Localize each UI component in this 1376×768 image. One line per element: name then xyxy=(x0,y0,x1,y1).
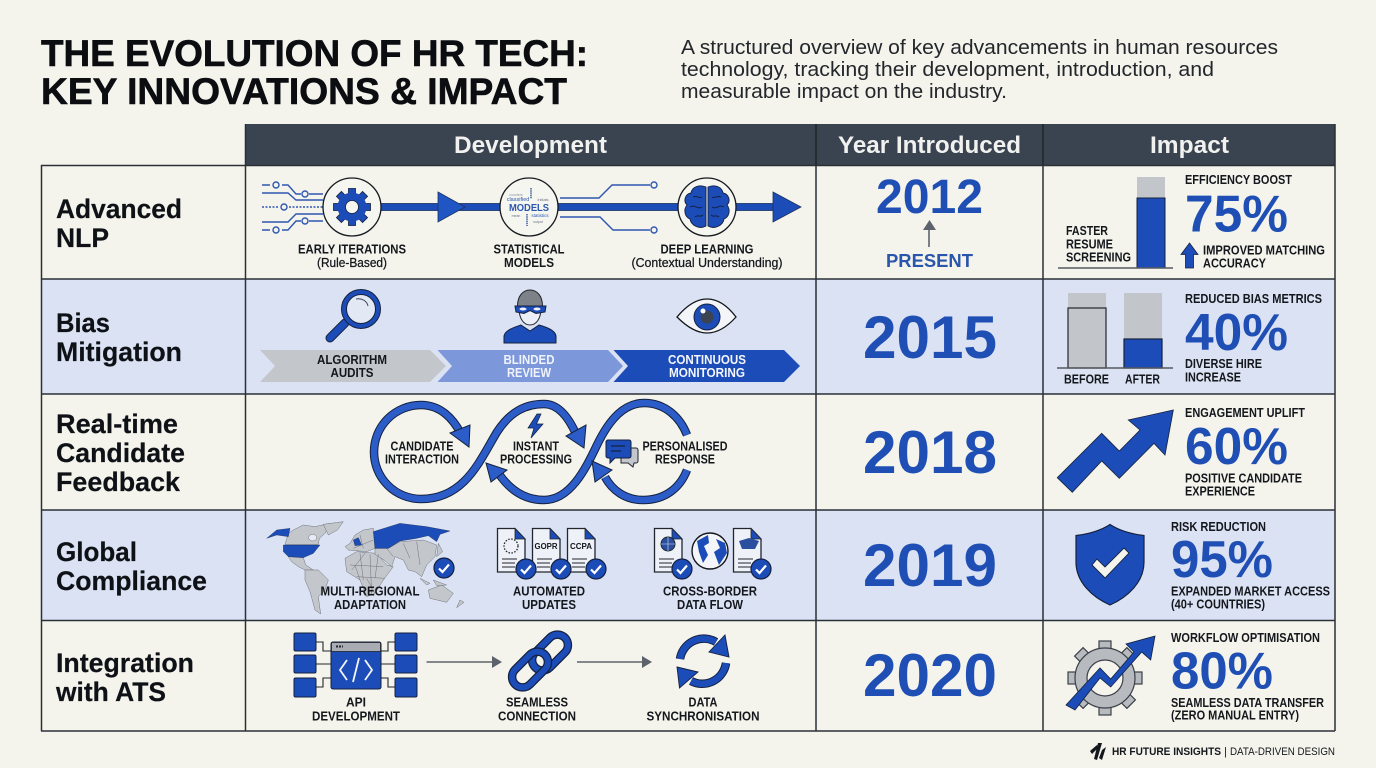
impact: 95%: (40+ COUNTRIES) xyxy=(1171,598,1265,612)
subtitle text block: measurable impact on the industry. xyxy=(681,81,1007,103)
icon: models word cloud: MODELS xyxy=(509,202,549,214)
automated updates caption: AUTOMATED xyxy=(513,584,585,598)
integration captions: DEVELOPMENT xyxy=(312,710,400,724)
table grid with tinted rows xyxy=(41,124,1335,731)
icon: gear xyxy=(323,178,381,236)
loop labels xyxy=(385,440,728,466)
row label xyxy=(56,194,182,253)
before and after bars xyxy=(1057,293,1173,386)
row: Integration with ATS xyxy=(55,630,1324,724)
impact: 75%: IMPROVED MATCHING xyxy=(1203,244,1325,258)
icon: models word cloud: counters xyxy=(509,193,523,197)
icon: eye xyxy=(677,299,736,333)
impact: 75% xyxy=(1058,173,1325,270)
impact: 40%: REDUCED BIAS METRICS xyxy=(1185,292,1322,306)
icon: lightning bolt xyxy=(528,414,543,438)
row label: Global xyxy=(56,537,137,567)
stage labels xyxy=(298,242,782,270)
loop labels: PERSONALISED xyxy=(642,440,728,454)
icon: models word cloud: mean xyxy=(512,214,520,218)
cross-border caption xyxy=(663,584,757,612)
impact: 40% xyxy=(1057,292,1322,386)
arrowheads xyxy=(450,425,612,482)
chevron: continuous monitoring: MONITORING xyxy=(669,366,745,380)
chevron: continuous monitoring xyxy=(614,350,800,382)
chevron: blinded review: REVIEW xyxy=(507,366,551,380)
row label xyxy=(55,648,194,707)
subtitle text block xyxy=(681,37,1278,103)
impact: 75%: 75% xyxy=(1185,184,1288,242)
chevron: blinded review: BLINDED xyxy=(504,353,554,367)
impact: 80% xyxy=(1066,631,1324,722)
row label: NLP xyxy=(56,223,109,253)
icon: anonymous person xyxy=(504,290,556,343)
footer credit: | xyxy=(1224,746,1227,758)
icon: magnifier xyxy=(330,292,378,338)
year: 2012 to present: PRESENT xyxy=(886,251,973,271)
row label xyxy=(56,308,182,367)
year: 2020: 2020 xyxy=(863,642,997,709)
icon: compliance documents: GOPR xyxy=(534,542,558,551)
table header bar xyxy=(245,124,1335,166)
integration captions: CONNECTION xyxy=(498,710,576,724)
impact: 75%: ACCURACY xyxy=(1203,256,1267,270)
chevron: continuous monitoring: CONTINUOUS xyxy=(668,353,746,367)
stage labels: (Contextual Understanding) xyxy=(632,256,782,270)
footer credit: HR FUTURE INSIGHTS xyxy=(1112,746,1221,758)
integration captions: SYNCHRONISATION xyxy=(646,710,760,724)
icon: shield with check xyxy=(1076,524,1144,605)
impact: 95%: 95% xyxy=(1171,530,1273,588)
year: 2019: 2019 xyxy=(863,532,997,599)
chevron: algorithm audits xyxy=(260,350,446,382)
year: 2015: 2015 xyxy=(863,304,997,371)
before and after bars: BEFORE xyxy=(1064,372,1109,386)
impact: 60% xyxy=(1057,406,1305,498)
row label xyxy=(56,409,185,497)
row: Advanced NLP xyxy=(56,171,1325,271)
arrow to synchronisation xyxy=(577,656,652,668)
bar chart: RESUME xyxy=(1066,238,1113,252)
subtitle text block: A structured overview of key advancements in human resources xyxy=(681,37,1278,59)
bar chart: FASTER xyxy=(1066,224,1108,238)
icon: up arrow xyxy=(1181,243,1198,268)
impact: 95%: RISK REDUCTION xyxy=(1171,520,1266,534)
icon: compliance documents: CCPA xyxy=(570,542,592,551)
table header bar: Year Introduced xyxy=(838,132,1021,159)
icon: models word cloud: output xyxy=(533,220,543,224)
impact: 40%: 40% xyxy=(1185,303,1288,361)
stage labels: DEEP LEARNING xyxy=(660,242,754,256)
circuit lines xyxy=(262,182,657,233)
bar chart: SCREENING xyxy=(1066,250,1131,264)
map caption: MULTI-REGIONAL xyxy=(320,584,420,598)
impact: 75%: EFFICIENCY BOOST xyxy=(1185,173,1292,187)
development timeline xyxy=(262,178,801,270)
loop labels: INSTANT xyxy=(513,440,559,454)
row label: Advanced xyxy=(56,194,182,224)
integration captions: API xyxy=(346,696,366,710)
integration captions: SEAMLESS xyxy=(506,696,568,710)
bar chart xyxy=(1058,177,1173,268)
loop labels: RESPONSE xyxy=(655,452,715,466)
row: Global Compliance xyxy=(56,520,1330,614)
impact: 80%: WORKFLOW OPTIMISATION xyxy=(1171,631,1320,645)
impact: 40%: INCREASE xyxy=(1185,370,1241,384)
integration captions xyxy=(312,696,760,724)
icon: sync arrows xyxy=(677,635,729,688)
subtitle text block: technology, tracking their development, introduction, and xyxy=(681,59,1214,81)
map caption xyxy=(320,584,420,612)
icon: chain link xyxy=(508,630,572,692)
row label xyxy=(56,537,207,596)
row label: Feedback xyxy=(56,467,181,497)
icon: map check badge xyxy=(434,558,454,578)
main arrow xyxy=(370,192,801,222)
row label: with ATS xyxy=(55,677,166,707)
impact: 80%: (ZERO MANUAL ENTRY) xyxy=(1171,708,1299,722)
icon: logo xyxy=(1090,743,1106,760)
footer credit xyxy=(1090,743,1335,760)
chevron: algorithm audits: ALGORITHM xyxy=(317,353,387,367)
before and after bars: AFTER xyxy=(1125,372,1160,386)
icon: models word cloud: initials xyxy=(537,197,549,202)
stage labels: EARLY ITERATIONS xyxy=(298,242,406,256)
loop outline xyxy=(374,403,687,500)
stage labels: STATISTICAL xyxy=(494,242,565,256)
title: KEY INNOVATIONS & IMPACT xyxy=(41,71,567,112)
table header bar: Development xyxy=(454,132,607,159)
impact: 40%: DIVERSE HIRE xyxy=(1185,357,1262,371)
year: 2012 to present: 2012 xyxy=(876,171,983,224)
title: THE EVOLUTION OF HR TECH: xyxy=(41,33,588,74)
icon: models word cloud: statistics xyxy=(531,213,549,218)
impact: 60%: ENGAGEMENT UPLIFT xyxy=(1185,406,1305,420)
impact: 95% xyxy=(1076,520,1330,612)
impact: 80%: 80% xyxy=(1171,642,1273,700)
stage labels: (Rule-Based) xyxy=(317,256,387,270)
automated updates caption: UPDATES xyxy=(522,598,576,612)
icon: API window with modules xyxy=(294,633,417,697)
title xyxy=(41,33,588,112)
icon: models word cloud xyxy=(500,178,558,236)
row label: Integration xyxy=(56,648,194,678)
infinity feedback loop xyxy=(374,403,687,500)
stage labels: MODELS xyxy=(504,256,554,270)
integration captions: DATA xyxy=(688,696,718,710)
icon: brain xyxy=(678,178,736,236)
row label: Mitigation xyxy=(56,337,182,367)
row label: Compliance xyxy=(56,566,207,596)
impact: 60%: 60% xyxy=(1185,417,1288,475)
loop fill xyxy=(374,403,687,500)
world map xyxy=(267,522,464,614)
automated updates caption xyxy=(513,584,585,612)
row label: Bias xyxy=(56,308,110,338)
icon: models word cloud: classified xyxy=(507,197,529,203)
map caption: ADAPTATION xyxy=(334,598,406,612)
year: 2018: 2018 xyxy=(863,419,997,486)
table header bar: Impact xyxy=(1150,132,1229,159)
year: 2012 to present xyxy=(876,171,983,271)
row label: Real-time xyxy=(56,409,178,439)
icon: rising arrow xyxy=(1057,410,1173,492)
loop labels: PROCESSING xyxy=(500,452,572,466)
chevron: algorithm audits: AUDITS xyxy=(330,366,374,380)
footer credit: DATA-DRIVEN DESIGN xyxy=(1230,746,1335,758)
impact: 80%: SEAMLESS DATA TRANSFER xyxy=(1171,696,1324,710)
icon: cross-border documents and globe xyxy=(654,528,771,579)
loop labels: CANDIDATE xyxy=(390,440,454,454)
row: Real-time Candidate Feedback xyxy=(56,403,1305,500)
cross-border caption: CROSS-BORDER xyxy=(663,584,757,598)
loop labels: INTERACTION xyxy=(385,452,459,466)
row label: Candidate xyxy=(56,438,185,468)
arrow to connection xyxy=(426,656,502,668)
row: Bias Mitigation xyxy=(56,290,1322,386)
icon: chat bubbles xyxy=(606,440,638,467)
chevron: blinded review xyxy=(438,350,623,382)
icon: compliance documents xyxy=(498,528,606,579)
impact: 60%: POSITIVE CANDIDATE xyxy=(1185,472,1302,486)
impact: 60%: EXPERIENCE xyxy=(1185,484,1255,498)
impact: 95%: EXPANDED MARKET ACCESS xyxy=(1171,584,1330,598)
icon: gear with rising arrow xyxy=(1066,636,1155,715)
cross-border caption: DATA FLOW xyxy=(677,598,743,612)
